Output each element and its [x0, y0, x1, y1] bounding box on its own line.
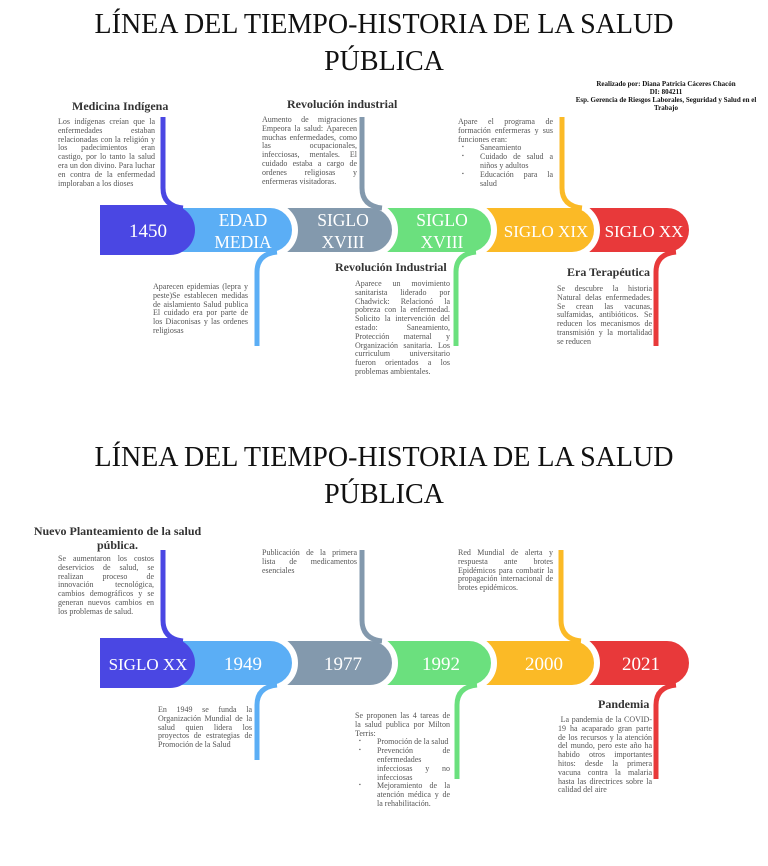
- title top: LÍNEA DEL TIEMPO-HISTORIA DE LA SALUD: [95, 9, 673, 40]
- heading: Nuevo Planteamiento: Nuevo Planteamiento de la salud pública.: [34, 524, 201, 552]
- text: 1992: [355, 711, 450, 808]
- segment labels bottom: SIGLO XX: [109, 655, 187, 674]
- segment labels top: XVIII: [421, 232, 464, 252]
- heading: Medicina Indígena: Medicina Indígena: [72, 99, 168, 113]
- heading: Revolución Industrial: Revolución Industrial: [335, 260, 447, 274]
- segment labels top: MEDIA: [214, 232, 272, 252]
- text: siglo xix: [458, 117, 553, 188]
- text: medicina indigena: Los indígenas creían que la enfermedades estaban relacionadas con la religión y los padecimientos eran castigo, por lo tanto la salud era un don divino. Para luchar en contra de la enfermedad imploraban a los dioses: [58, 117, 155, 188]
- segment labels top: EDAD: [219, 210, 267, 230]
- text: pandemia: La pandemia de la COVID-19 ha acaparado gran parte de los recursos y la atención del mundo, pero este año ha habido otros importantes hitos: desde la primera vacuna contra la malaria hasta las directrices sobre la calidad del aire: [558, 715, 652, 794]
- text: siglo xix: Educación para la salud: [480, 170, 553, 188]
- heading: Pandemia: Pandemia: [598, 697, 649, 711]
- segment labels bottom: 1949: [224, 654, 262, 675]
- credits: Realizado por: Diana Patricia Cáceres Chacón: [596, 80, 736, 88]
- segment labels top: SIGLO: [317, 210, 369, 230]
- segment labels bottom: 2000: [525, 654, 563, 675]
- title top: PÚBLICA: [324, 46, 444, 77]
- segment labels bottom: [109, 654, 660, 675]
- text: 1977: Publicación de la primera lista de medicamentos esenciales: [262, 548, 357, 575]
- text: siglo xix: Cuidado de salud a niños y adultos: [480, 152, 553, 170]
- segment labels top: SIGLO: [416, 210, 468, 230]
- segment labels bottom: 1992: [422, 654, 460, 675]
- segment labels top: [129, 210, 683, 252]
- credits: Esp. Gerencia de Riesgos Laborales, Seguridad y Salud en el Trabajo: [576, 96, 756, 112]
- text: 2000: Red Mundial de alerta y respuesta ante brotes Epidémicos para combatir la propagación internacional de brotes epidémicos.: [458, 548, 553, 592]
- credits: DI: 804211: [650, 88, 682, 96]
- band: top timeline: [100, 205, 692, 255]
- credits: [576, 80, 756, 112]
- title bottom: [95, 442, 673, 510]
- title bottom: PÚBLICA: [324, 479, 444, 510]
- text: 1992: Mejoramiento de la atención médica y de la rehabilitación.: [377, 781, 450, 808]
- title bottom: LÍNEA DEL TIEMPO-HISTORIA DE LA SALUD: [95, 442, 673, 473]
- text: era terapeutica: Se descubre la historia Natural delas enfermedades. Se crean las vacunas, sulfamidas, antibióticos. Se reducen los mecanismos de transmisión y la mortalidad se reducen: [557, 284, 652, 346]
- text: edad media: Aparecen epidemias (lepra y peste)Se establecen medidas de aislamiento Salud publica El cuidado era por parte de los Diaconisas y las ordenes religiosas: [153, 282, 248, 335]
- heading: Revolución industrial: Revolución industrial: [287, 97, 397, 111]
- heading: Era Terapéutica: Era Terapéutica: [567, 265, 650, 279]
- title top: [95, 8, 673, 77]
- segment labels top: SIGLO XX: [605, 222, 683, 241]
- band: bottom timeline: [100, 638, 692, 688]
- text: 1992: Prevención de enfermedades infecciosas y no infecciosas: [377, 746, 450, 782]
- segment labels bottom: 1977: [324, 654, 362, 675]
- segment labels top: 1450: [129, 221, 167, 242]
- text: 1949: En 1949 se funda la Organización Mundial de la salud quien lidera los proyectos de estrategias de Promoción de la Salud: [158, 705, 252, 749]
- text: revolucion industrial top: Aumento de migraciones Empeora la salud: Aparecen muchas enfermedades, como las ocupacionales, infecciosas, mentales. El cuidado estaba a cargo de ordenes religiosas y enfermeras visitadoras.: [262, 115, 357, 186]
- text: siglo xix: Apare el programa de formación enfermeras y sus funciones eran:: [458, 117, 553, 144]
- text: siglo xix: Saneamiento: [480, 143, 521, 152]
- segment labels top: XVIII: [322, 232, 365, 252]
- text: nuevo planteamiento: Se aumentaron los costos deservicios de salud, se realizan proceso de innovación tecnológica, cambios demográficos y se generan nuevos cambios en los problemas de salud.: [58, 554, 154, 616]
- stems top timeline: [163, 117, 676, 346]
- stems bottom timeline: [163, 550, 676, 779]
- segment labels top: SIGLO XIX: [504, 222, 588, 241]
- text: 1992: Se proponen las 4 tareas de la salud publica por Milton Terris:: [355, 711, 450, 738]
- text: revolucion industrial bottom: Aparece un movimiento sanitarista liderado por Chadwick: Relacionó la pobreza con la enfermedad. Solicito la intervención del estado: Saneamiento, Protección maternal y Organización sanitaria. Los curriculum universitario fueron orientados a los problemas ambientales.: [355, 279, 450, 376]
- text: 1992: Promoción de la salud: [377, 737, 448, 746]
- segment labels bottom: 2021: [622, 654, 660, 675]
